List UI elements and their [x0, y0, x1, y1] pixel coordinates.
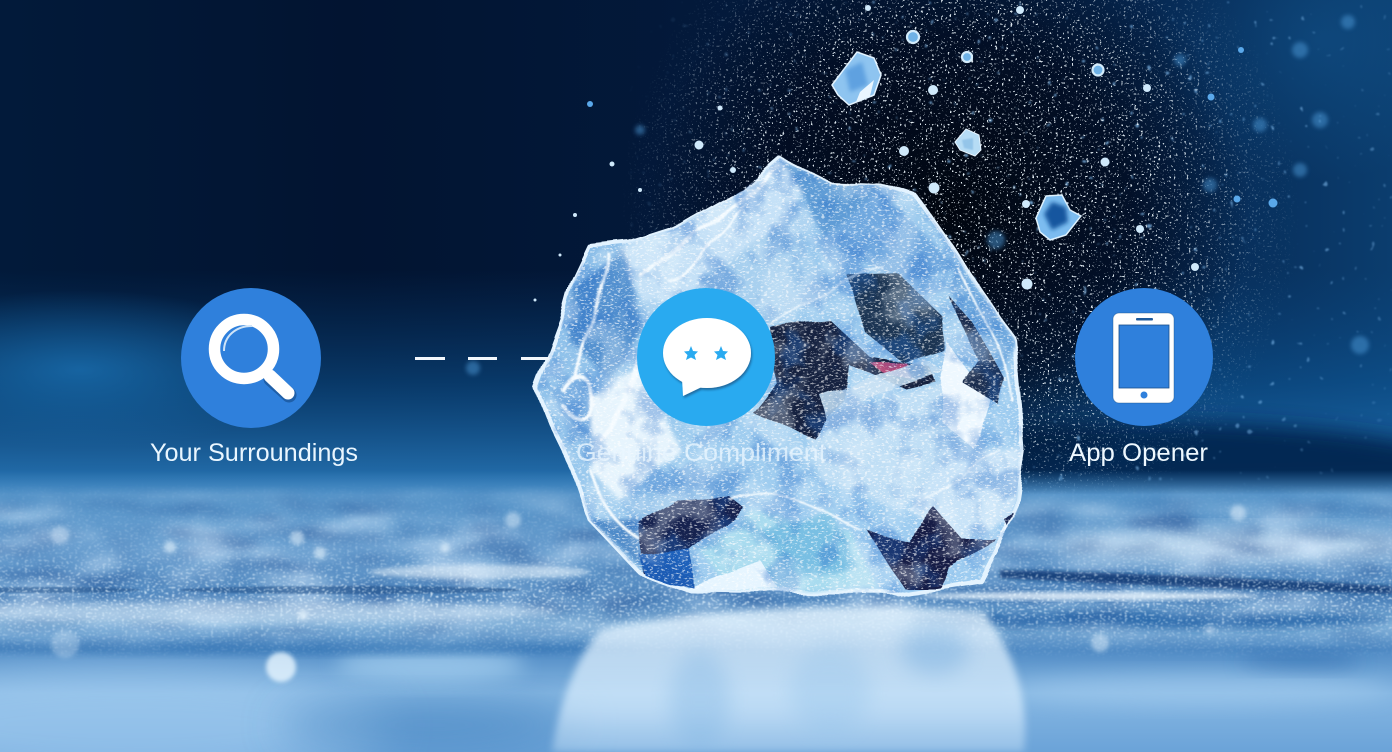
dark facet: upper [847, 272, 943, 363]
label: your surroundings: Your Surroundings [150, 439, 358, 467]
icy floor [0, 470, 1392, 752]
ice surface scratches [530, 150, 1030, 600]
icon: blue circle with magnifying glass [181, 288, 321, 428]
ice particle spray [464, 0, 1392, 492]
step 2: genuine compliment [576, 288, 826, 467]
floating ice cube: medium [1036, 195, 1081, 240]
floating ice cube: small [955, 129, 981, 156]
dark facet: bottom right [867, 508, 997, 587]
ice ridges [562, 165, 1012, 540]
connector: dashed line [415, 357, 549, 360]
floor bokeh lights [51, 505, 1246, 682]
floating ice cube: large [832, 52, 881, 105]
ice reflection on floor [552, 607, 1025, 752]
ice body facets [537, 158, 1023, 593]
step 1: your surroundings [150, 288, 358, 467]
ice tint variation [530, 150, 1030, 600]
bokeh rings [907, 31, 1104, 76]
dark facet: bottom left [640, 497, 743, 587]
icon: blue circle with smartphone [1075, 288, 1213, 426]
dark facet: centre [753, 320, 937, 437]
pink glint [870, 363, 913, 380]
ice boulder [530, 150, 1030, 600]
label: genuine compliment: Genuine Compliment [576, 439, 826, 467]
icon: light blue circle with chat bubble [637, 288, 775, 426]
step 3: app opener [1069, 288, 1213, 467]
label: app opener: App Opener [1069, 439, 1208, 467]
dark facet: right [950, 297, 1003, 403]
